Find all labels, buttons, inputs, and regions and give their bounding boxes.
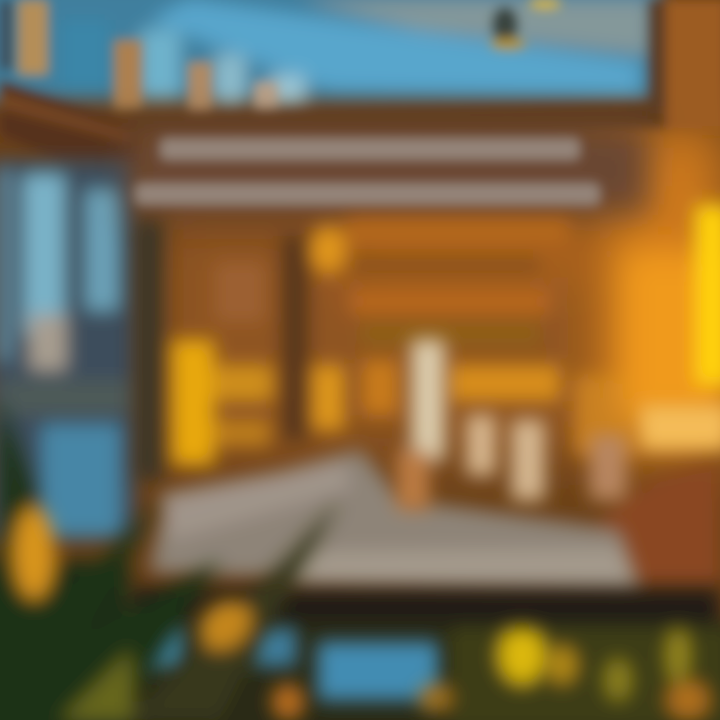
- panel: shelves: [215, 218, 570, 343]
- panel: blue pool: [138, 625, 438, 700]
- panel: foreground plants right: [419, 627, 720, 720]
- panel: blue left windows: [0, 160, 135, 540]
- panel: glowing yellow shelves: [172, 340, 635, 465]
- icon: white vases on table: [397, 340, 626, 510]
- panel: reddish armchair: [590, 465, 720, 585]
- heading text bands: [135, 138, 600, 205]
- panel: heading area: [130, 125, 650, 215]
- panel: pale table: [150, 450, 640, 592]
- panel: blue glass ceiling: [0, 0, 660, 105]
- panel: dark centre column: [135, 220, 308, 480]
- panel: dark floor band: [0, 588, 720, 720]
- panel: warm orange back wall: [150, 120, 720, 460]
- panel: wooden ceiling beams: [0, 0, 720, 165]
- icon: lantern on ceiling: [490, 0, 561, 50]
- panel: foreground plants left: [0, 400, 340, 720]
- ceiling window frames: [0, 0, 278, 114]
- panel: bright sunlight at right: [620, 205, 720, 450]
